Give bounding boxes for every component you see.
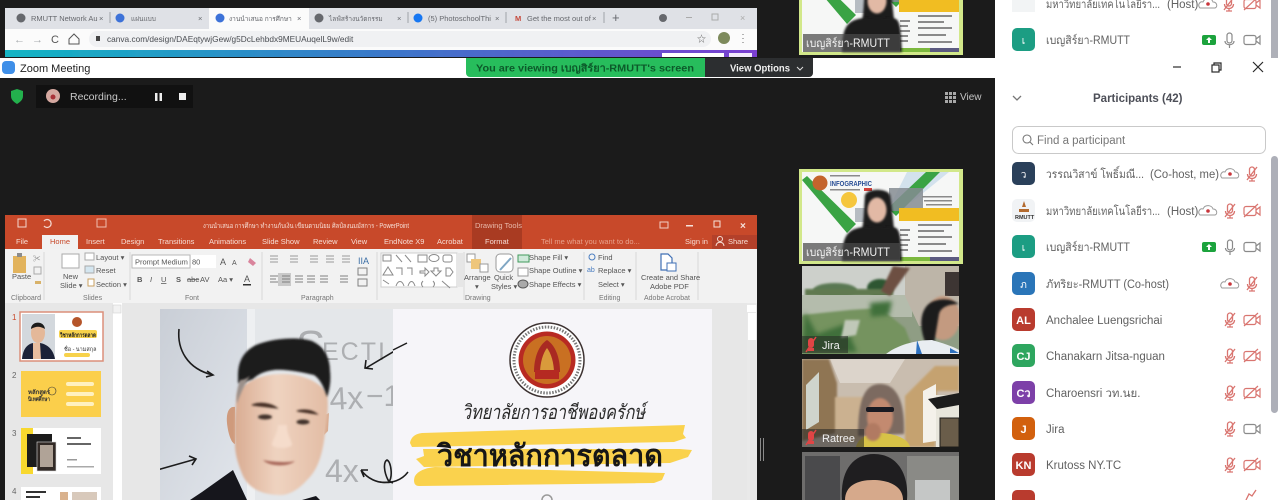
powerpoint ribbon: Styles ▾ [491, 282, 518, 291]
powerpoint ribbon: A [244, 274, 250, 284]
participant: Krutoss [1012, 453, 1260, 476]
powerpoint ribbon: Font [185, 295, 199, 302]
powerpoint ribbon: New [63, 272, 79, 281]
participants heading [1013, 93, 1183, 105]
college name: วิทยาลัยการอาชีพองครักษ์ [462, 401, 649, 424]
video: third participant [802, 452, 959, 500]
slide photo: man at whiteboard: ECTI [322, 338, 387, 366]
participant: university host (top) [1012, 0, 1260, 12]
powerpoint ribbon: Editing [599, 295, 621, 302]
slide scrollbar [747, 303, 757, 500]
scrollbar top [1271, 0, 1278, 58]
powerpoint ribbon: A [232, 260, 237, 267]
video: Jira [802, 266, 960, 354]
participant: presenter [1012, 235, 1260, 258]
view button [945, 92, 982, 103]
participant: university host [1012, 199, 1260, 222]
participant: presenter (top): เ [1022, 36, 1025, 47]
powerpoint ribbon: Section ▾ [96, 280, 127, 289]
slide thumbnails pane: 1 [12, 313, 17, 322]
panel: shared browser window [5, 8, 757, 57]
logo: vocational education commission [510, 323, 584, 397]
ear [227, 407, 235, 444]
participant: Chanakarn [1012, 344, 1260, 367]
window controls [1173, 62, 1263, 72]
thumbnail: slide 1 [20, 312, 103, 361]
participant: presenter (top) [1012, 28, 1260, 51]
video: top presenter thumbnail [799, 0, 963, 55]
participant: co-host me: (Co-host, me) [1150, 169, 1219, 181]
powerpoint title bar: Slide Show [262, 237, 300, 246]
powerpoint title bar: Tell me what you want to do... [541, 237, 640, 246]
powerpoint ribbon: Slide ▾ [60, 281, 83, 290]
powerpoint title bar: View [351, 237, 368, 246]
browser address bar [5, 29, 757, 50]
powerpoint ribbon: Arrange [464, 273, 491, 282]
powerpoint title bar: Review [313, 237, 338, 246]
powerpoint ribbon: Reset [96, 266, 117, 275]
browser tab strip: RMUTT Network Au [31, 14, 98, 23]
banner: viewing screen: You are viewing เบญสิร์ยา-RMUTT's screen [476, 62, 694, 74]
yellow brush highlight [410, 425, 692, 486]
powerpoint ribbon: Drawing [465, 295, 491, 302]
powerpoint ribbon: B [137, 275, 143, 284]
search box: Find a participant [1037, 135, 1126, 147]
slide thumbnails pane: 3 [12, 429, 17, 438]
browser tab strip: แผ่นแบบ [131, 16, 156, 23]
thumbnail: slide 1: วิชาหลักการตลาด [60, 331, 96, 339]
browser tab strip: × [592, 14, 596, 23]
browser address bar: ☆ [697, 34, 706, 44]
panel: participants window [995, 62, 1280, 500]
powerpoint ribbon: Prompt Medium [135, 258, 188, 266]
browser tab strip: × [99, 14, 103, 23]
recording indicator: Recording... [70, 91, 127, 103]
participant: Krutoss: KN [1016, 460, 1031, 472]
participant: presenter: เ [1022, 243, 1025, 254]
video: Ratree [802, 359, 959, 447]
powerpoint ribbon: Shape Fill ▾ [529, 253, 568, 262]
browser tab strip: × [198, 14, 202, 23]
powerpoint ribbon: Shape Effects ▾ [529, 280, 582, 289]
powerpoint ribbon: Quick [494, 273, 513, 282]
browser address bar: → [32, 34, 43, 46]
participant: co-host me: ว [1021, 170, 1026, 181]
powerpoint ribbon: S [176, 275, 181, 284]
participant: co-host me: วรรณวิสาข์ โพธิ์มณี... [1046, 165, 1144, 181]
face [235, 374, 328, 495]
participant: university host: RMUTT [1015, 215, 1035, 221]
slide photo: man at whiteboard: 4x [325, 453, 359, 489]
powerpoint title bar: Insert [86, 237, 106, 246]
editing workspace background [5, 303, 757, 500]
scrollbar [1271, 156, 1278, 413]
powerpoint ribbon [5, 249, 757, 500]
powerpoint title bar: งานนำเสนอ การศึกษา ทำงานกับเงิน เขียนตามนิยม ศิลป์ลงนมมัสการ - PowerPoint [203, 221, 409, 230]
recording indicator [36, 85, 193, 108]
powerpoint ribbon: Paste [12, 272, 31, 281]
powerpoint ribbon: Clipboard [11, 295, 41, 302]
powerpoint ribbon: IIA [358, 256, 369, 266]
powerpoint ribbon: Aa ▾ [218, 275, 233, 284]
powerpoint title bar: Animations [209, 237, 246, 246]
thumbnail: slide 1: ชื่อ - นามสกุล [64, 345, 96, 353]
powerpoint ribbon: U [161, 275, 166, 284]
participant: co-host: ภัทริยะ-RMUTT (Co-host) [1046, 278, 1169, 291]
video: active speaker [799, 169, 963, 264]
browser tab strip: Get the most out of [527, 14, 592, 23]
powerpoint ribbon: ▾ [475, 282, 479, 291]
powerpoint ribbon: Adobe PDF [650, 282, 689, 291]
participant: co-host: ภ [1020, 280, 1027, 291]
participant: Jira: J [1020, 424, 1027, 436]
browser tab strip: × [495, 14, 499, 23]
powerpoint ribbon: I [150, 275, 152, 284]
browser tab strip: × [740, 13, 745, 23]
thumbnail: slide 4 [21, 487, 101, 500]
participant: Charoensri: Cว [1016, 388, 1031, 400]
slide canvas [150, 303, 757, 500]
browser tab strip: × [397, 14, 401, 23]
slide photo: man at whiteboard: S [296, 322, 325, 371]
participant: university host: (Host) [1167, 206, 1198, 218]
slide photo: man at whiteboard: 4x [328, 379, 364, 417]
thumbnail: slide 2: นิเทศศึกษา [28, 395, 50, 403]
participant: Krutoss: Krutoss NY.TC [1046, 460, 1121, 472]
powerpoint ribbon: abc [187, 275, 199, 284]
powerpoint title bar: Home [50, 237, 70, 246]
participant: partially visible [1012, 490, 1256, 500]
powerpoint title bar: × [740, 221, 746, 232]
participant: Charoensri: Charoensri วท.นย. [1046, 388, 1140, 400]
powerpoint ribbon: Select ▾ [598, 280, 625, 289]
participant: presenter (top): เบญสิร์ยา-RMUTT [1046, 33, 1130, 47]
participant: Anchalee: Anchalee Luengsrichai [1046, 315, 1162, 327]
browser tab strip: ไลฟ์สร้างนวัตกรรม [328, 15, 383, 23]
powerpoint ribbon: Adobe Acrobat [644, 295, 690, 302]
powerpoint ribbon: Shape Outline ▾ [529, 266, 583, 275]
slide thumbnails pane: 2 [12, 371, 17, 380]
banner: viewing screen [466, 58, 813, 77]
slide photo: man at whiteboard [160, 309, 393, 500]
browser address bar: ← [14, 34, 25, 46]
participant: Jira: Jira [1046, 424, 1065, 436]
search box [1012, 126, 1266, 154]
participant: Jira [1012, 417, 1260, 440]
small icon at slide bottom [542, 495, 552, 500]
powerpoint ribbon: AV [200, 275, 209, 284]
participant: Chanakarn: Chanakarn Jitsa-nguan [1046, 351, 1165, 363]
title bar: Zoom Meeting: Zoom Meeting [20, 63, 90, 75]
powerpoint ribbon: 80 [192, 258, 200, 266]
participant: co-host [1012, 272, 1257, 295]
video: Ratree: Ratree [822, 433, 855, 445]
participants heading: Participants (42) [1093, 93, 1183, 105]
browser tab strip: × [297, 14, 301, 23]
powerpoint title bar: Design [121, 237, 144, 246]
browser tab strip [5, 8, 757, 29]
powerpoint title bar [5, 215, 757, 249]
browser tab strip: งานนำเสนอ การศึกษา [229, 15, 292, 23]
hair [238, 338, 330, 397]
banner: viewing screen: View Options [730, 64, 790, 74]
participant: co-host me [1012, 162, 1257, 185]
slide photo: man at whiteboard: −1 [366, 380, 400, 413]
powerpoint title bar: Drawing Tools [475, 221, 522, 230]
browser tab strip: (5) PhotoschoolThi [428, 14, 491, 23]
browser address bar: canva.com/design/DAEqtywjGew/g5DcLehbdx9MEUAuqelL9w/edit [107, 34, 354, 44]
participant: Charoensri [1012, 381, 1260, 404]
participant: university host: มหาวิทยาลัยเทคโนโลยีรา... [1046, 204, 1160, 218]
powerpoint ribbon: Slides [83, 295, 103, 302]
slide thumbnails pane: 4 [12, 487, 17, 496]
view button: View [960, 92, 982, 103]
browser address bar: C [51, 34, 59, 46]
video: Jira: Jira [822, 340, 841, 352]
powerpoint ribbon: Find [598, 253, 613, 262]
participant: presenter: เบญสิร์ยา-RMUTT [1046, 240, 1130, 254]
splitter handle [760, 438, 764, 461]
powerpoint ribbon: ✂ [33, 254, 41, 263]
powerpoint title bar: File [16, 237, 28, 246]
powerpoint title bar: Format [485, 237, 510, 246]
powerpoint ribbon: ab [587, 267, 595, 274]
title bar: Zoom Meeting [0, 58, 1280, 78]
powerpoint ribbon: Layout ▾ [96, 253, 125, 262]
facial features [252, 403, 317, 465]
subject title: วิชาหลักการตลาด [436, 440, 663, 473]
thumbnail: slide 2: หลักสูตร [28, 388, 51, 397]
powerpoint ribbon: Paragraph [301, 295, 334, 302]
powerpoint ribbon: Replace ▾ [598, 266, 632, 275]
powerpoint title bar: Transitions [158, 237, 195, 246]
participant: Chanakarn: CJ [1016, 351, 1031, 363]
powerpoint ribbon: A [220, 257, 226, 267]
thumbnail: slide 2 [21, 371, 101, 417]
browser tab strip: + [612, 10, 620, 25]
slide thumbnails pane [12, 303, 122, 500]
powerpoint title bar: Acrobat [437, 237, 464, 246]
participant: Anchalee: AL [1016, 315, 1031, 327]
sketch arrows [150, 329, 410, 483]
powerpoint ribbon: Create and Share [641, 273, 700, 282]
shirt [190, 470, 320, 500]
sketch line over slide [380, 343, 408, 483]
powerpoint title bar: Share [728, 237, 748, 246]
canva gradient bar [5, 50, 757, 57]
powerpoint title bar: EndNote X9 [384, 237, 424, 246]
thumbnail: slide 3 [21, 428, 101, 474]
panel: participants (previous window edge) [995, 0, 1280, 58]
security shield icon [11, 89, 23, 104]
participant: Anchalee [1012, 308, 1260, 331]
powerpoint title bar: Sign in [685, 237, 708, 246]
browser tab strip: M [515, 14, 521, 23]
